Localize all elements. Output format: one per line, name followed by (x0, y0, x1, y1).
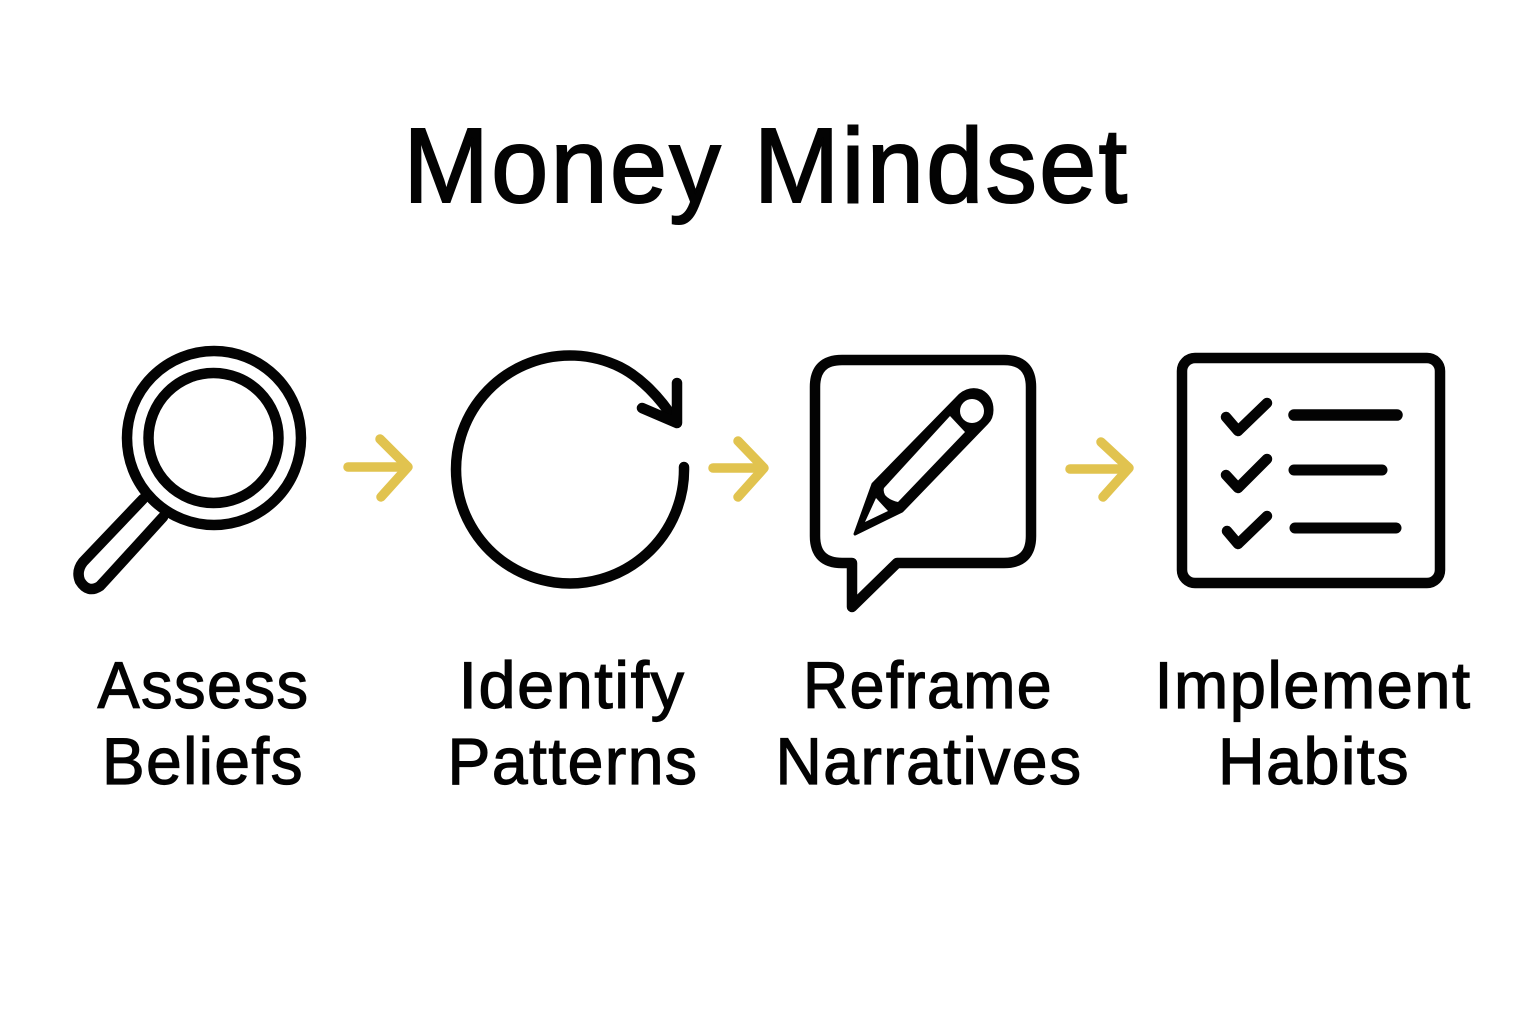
label: Identify Patterns: Identify (458, 648, 686, 722)
pencil (855, 390, 992, 534)
label: Assess Beliefs (98, 648, 310, 798)
label: Identify Patterns (448, 648, 698, 798)
label: Assess Beliefs: Assess (98, 648, 310, 722)
arrow: reframe to implement (1070, 442, 1129, 497)
label: Reframe Narratives: Narratives (776, 724, 1082, 798)
label: Identify Patterns: Patterns (448, 724, 698, 798)
label: Reframe Narratives: Reframe (803, 648, 1053, 722)
label: Reframe Narratives (776, 648, 1082, 798)
speech bubble outline (815, 360, 1031, 607)
label: Implement Habits: Habits (1218, 724, 1410, 798)
icon: magnifying glass (79, 351, 301, 589)
icon: checklist (1182, 358, 1440, 583)
icon: circular arrow (456, 355, 684, 583)
icon: speech bubble with pencil (815, 360, 1031, 607)
label: Implement Habits (1154, 648, 1472, 798)
arrow: assess to identify (348, 439, 408, 497)
label: Implement Habits: Implement (1154, 648, 1472, 722)
arrow: identify to reframe (713, 441, 764, 497)
label: Assess Beliefs: Beliefs (102, 724, 304, 798)
title: Money Mindset (404, 107, 1130, 225)
